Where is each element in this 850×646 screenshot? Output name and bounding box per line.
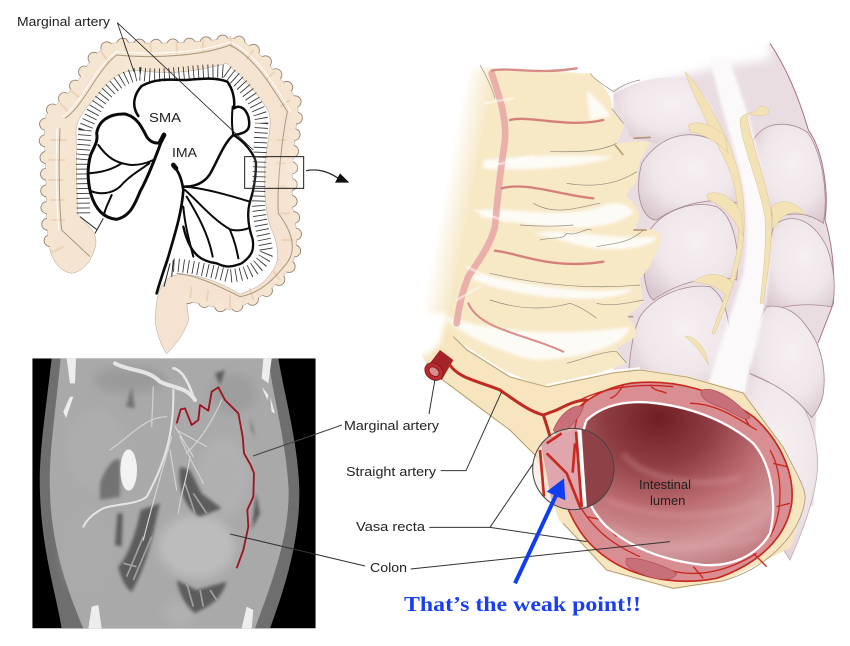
wall vessels bbox=[575, 385, 790, 578]
label: SMA: SMA bbox=[149, 110, 181, 125]
body outer layer bbox=[40, 358, 299, 628]
label: vasa recta: Vasa recta bbox=[356, 519, 426, 534]
leader: vasa recta bbox=[429, 463, 587, 542]
label: intestinal lumen: Intestinal bbox=[639, 477, 691, 492]
lumen folds bbox=[607, 453, 763, 546]
top fade bbox=[420, 47, 590, 77]
root fold line bbox=[427, 337, 805, 588]
colon body bbox=[613, 37, 834, 560]
magnified vessels bbox=[540, 432, 582, 508]
label: straight artery: Straight artery bbox=[346, 464, 437, 479]
CT leader: colon bbox=[230, 534, 365, 566]
cream taenia and appendices bbox=[685, 72, 805, 365]
colon scalloped edge bbox=[45, 40, 297, 307]
scan background bbox=[32, 358, 316, 628]
CT leader: marginal artery bbox=[253, 425, 342, 456]
panel: CT scan bbox=[32, 358, 316, 628]
lower outer lobes bbox=[733, 373, 818, 560]
white submucosa bbox=[579, 430, 585, 507]
scan grain bbox=[32, 358, 316, 628]
weak point arrow bbox=[515, 478, 565, 583]
colon haustra bbox=[48, 36, 293, 308]
selection box bbox=[245, 157, 304, 188]
label: marginal artery top: Marginal artery bbox=[17, 14, 111, 29]
callout: weak point: That’s the weak point!! bbox=[404, 592, 641, 616]
magnified weak point circle bbox=[533, 427, 617, 510]
panel: colon cross section bbox=[397, 313, 805, 588]
marginal and straight vessels pale bbox=[457, 68, 603, 352]
body inner tissue bbox=[50, 358, 289, 628]
lumen bbox=[581, 402, 773, 565]
ribs and pelvis bbox=[63, 358, 275, 628]
panel: colon longitudinal illustration bbox=[387, 37, 834, 560]
label: intestinal lumen: lumen bbox=[650, 493, 685, 508]
mesenteric fold body bbox=[387, 47, 662, 390]
mesentery highlights bbox=[443, 90, 657, 360]
mesentery mottling bbox=[123, 483, 217, 607]
central white mesenteric band bbox=[705, 57, 769, 393]
marginal artery cut end bbox=[421, 350, 453, 384]
root top-left fade bbox=[397, 313, 447, 357]
bright vessels bbox=[83, 363, 222, 540]
leader: marginal artery bbox=[429, 379, 435, 414]
dark mesentery bbox=[100, 370, 260, 613]
leader lines bbox=[117, 23, 253, 150]
mesentery root band bbox=[417, 323, 805, 588]
colon taenia bbox=[59, 45, 292, 297]
colon scallop fill bbox=[45, 40, 297, 307]
marginal artery highlight bbox=[177, 387, 254, 568]
label: IMA: IMA bbox=[172, 145, 197, 160]
colon edge bbox=[770, 43, 834, 343]
haustra lobes bbox=[613, 77, 834, 560]
panel: colon arterial supply diagram bbox=[44, 23, 349, 354]
contrast in kidney bbox=[120, 449, 137, 491]
white edge above root bbox=[547, 368, 640, 385]
vasa recta hatching bbox=[83, 71, 267, 276]
wedge of wall bbox=[540, 427, 588, 510]
leader: colon bbox=[411, 542, 670, 569]
colon wall ring bbox=[555, 382, 792, 581]
sigmoid vessels bbox=[80, 217, 173, 293]
fold lines bbox=[480, 65, 643, 363]
straight artery bbox=[450, 365, 587, 437]
arrow from box bbox=[306, 170, 349, 183]
label: colon: Colon bbox=[370, 560, 407, 575]
colon outline bbox=[44, 38, 298, 354]
marginal artery and branches bbox=[88, 79, 256, 293]
leader: straight artery bbox=[441, 392, 502, 471]
bowel bright regions bbox=[58, 368, 254, 583]
label: marginal artery: Marginal artery bbox=[344, 418, 440, 433]
submucosal folds bbox=[553, 389, 750, 579]
